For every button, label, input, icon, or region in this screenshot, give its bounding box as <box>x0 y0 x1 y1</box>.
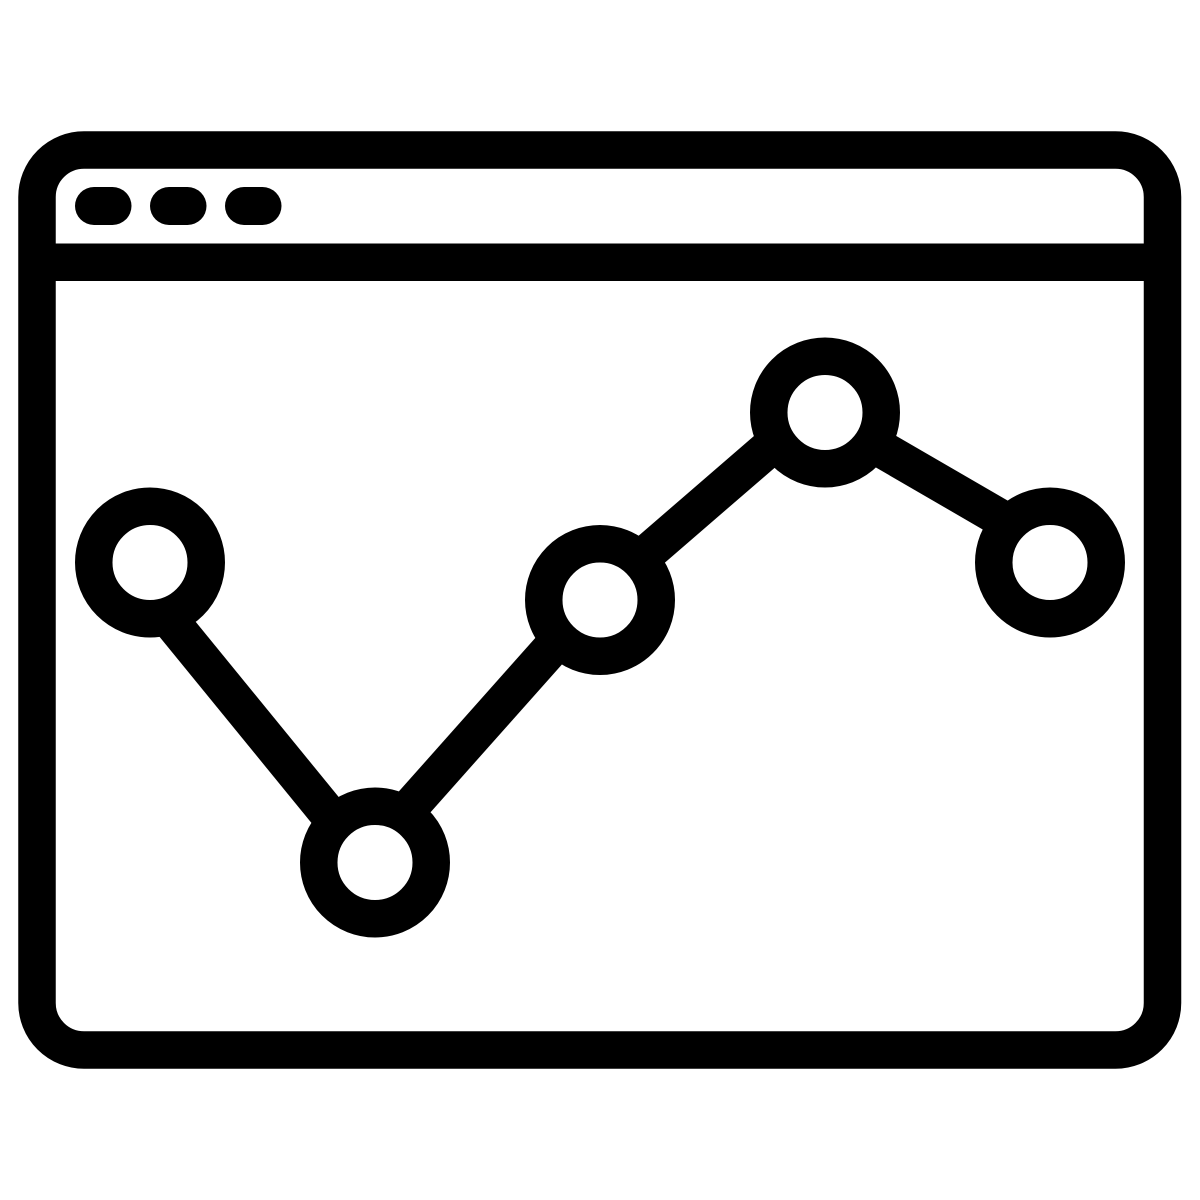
window control buttons <box>75 187 282 225</box>
line chart data points <box>94 356 1106 919</box>
line chart connecting segments <box>170 447 1002 816</box>
browser window frame <box>37 150 1162 1050</box>
